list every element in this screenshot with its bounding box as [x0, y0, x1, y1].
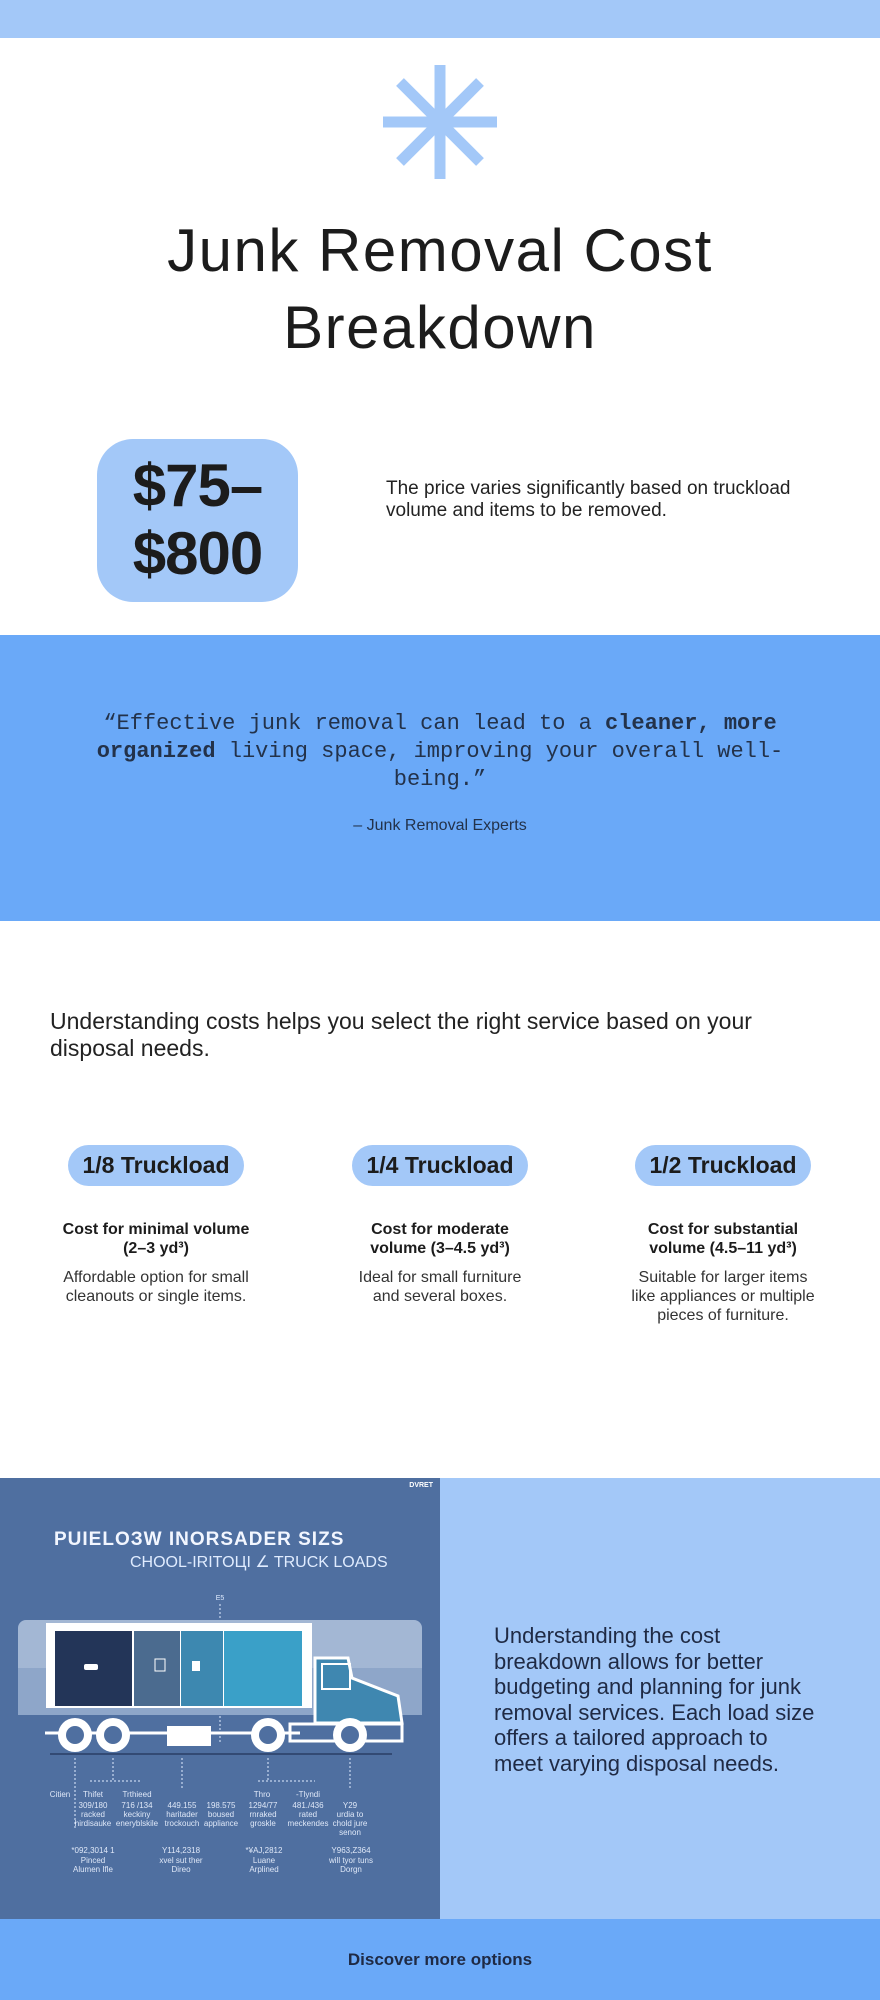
chart: truck load sizes illustration: Dorgn — [340, 1865, 362, 1874]
bold subtitle: volume (4.5–11 yd³) — [649, 1240, 797, 1257]
chart: truck load sizes illustration: 481./436 — [292, 1801, 324, 1810]
price badge — [97, 439, 298, 602]
chart: truck load sizes illustration: Direo — [171, 1865, 191, 1874]
chart: truck load sizes illustration: hirdisauke — [75, 1819, 112, 1828]
summary paragraph: budgeting and planning for junk — [494, 1674, 801, 1699]
pill — [68, 1145, 244, 1186]
footer: call to action: Discover more options — [348, 1950, 532, 1969]
chart: truck load sizes illustration: racked — [81, 1810, 105, 1819]
chart: truck load sizes illustration: chold jure — [333, 1819, 368, 1828]
bold subtitle — [63, 1221, 249, 1257]
quote text: “Effective junk removal can lead to a cleaner, more organized living space, improving your overall well-being.” — [97, 711, 783, 792]
price badge: $800 — [133, 520, 262, 587]
description — [359, 1269, 521, 1305]
bold subtitle: volume (3–4.5 yd³) — [370, 1240, 510, 1257]
chart: truck load sizes illustration: DVRET — [409, 1482, 434, 1489]
chart: truck load sizes illustration: Thro — [254, 1790, 271, 1799]
chart: truck load sizes illustration: E5 — [216, 1595, 224, 1602]
description — [631, 1269, 815, 1324]
chart: truck load sizes illustration: eneryblskile — [116, 1819, 159, 1828]
chart: truck load sizes illustration: rnraked — [249, 1810, 277, 1819]
chart: truck load sizes illustration: -Tlyndi — [296, 1790, 320, 1799]
chart: truck load sizes illustration: *¥AJ,2812 — [246, 1846, 283, 1855]
summary paragraph: meet varying disposal needs. — [494, 1750, 779, 1776]
chart: truck load sizes illustration: appliance — [204, 1819, 239, 1828]
summary paragraph: breakdown allows for better — [494, 1648, 763, 1674]
panel: 1/2 truckload — [631, 1145, 815, 1324]
chart: truck load sizes illustration — [0, 1478, 440, 1919]
chart: truck load sizes illustration: Trthieed — [122, 1790, 152, 1799]
pill — [635, 1145, 810, 1186]
intro text — [50, 1008, 752, 1061]
chart: truck load sizes illustration: keckiny — [124, 1810, 150, 1819]
chart: truck load sizes illustration: CHOOL-IRITOЦI ∠ TRUCK LOADS — [130, 1554, 388, 1571]
bold subtitle: Cost for moderate — [371, 1221, 509, 1238]
chart: truck load sizes illustration: 716 /134 — [121, 1801, 153, 1810]
chart: truck load sizes illustration: PUIELOЗW INORSADER SIZS — [54, 1529, 344, 1550]
chart: truck load sizes illustration: Alumen Ifle — [73, 1865, 114, 1874]
chart: truck load sizes illustration: 309/180 — [79, 1801, 108, 1810]
summary paragraph — [494, 1623, 814, 1776]
intro text: disposal needs. — [50, 1035, 210, 1061]
description: Affordable option for small cleanouts or single items. — [63, 1269, 249, 1305]
price description: The price varies significantly based on truckload volume and items to be removed. — [386, 478, 790, 521]
summary paragraph: Understanding the cost — [494, 1623, 720, 1648]
description: like appliances or multiple — [631, 1288, 815, 1305]
price badge: $75– — [133, 452, 262, 519]
intro text: Understanding costs helps you select the right service based on your — [50, 1008, 752, 1034]
bold subtitle — [370, 1221, 510, 1257]
chart: truck load sizes illustration: 1294/77 — [249, 1801, 278, 1810]
chart: truck load sizes illustration: rated — [299, 1810, 317, 1819]
chart: truck load sizes illustration: Pinced — [81, 1856, 105, 1865]
footer: call to action — [0, 1919, 880, 2000]
bold subtitle — [648, 1221, 798, 1257]
bold subtitle: (2–3 yd³) — [123, 1240, 189, 1257]
chart: truck load sizes illustration: Thifet — [83, 1790, 104, 1799]
panel: summary text — [440, 1478, 880, 1919]
panel: 1/4 truckload — [352, 1145, 528, 1305]
chart: truck load sizes illustration: boused — [208, 1810, 234, 1819]
description: and several boxes. — [373, 1288, 507, 1305]
pill — [352, 1145, 528, 1186]
chart: truck load sizes illustration: 198.575 — [207, 1801, 236, 1810]
chart: truck load sizes illustration: meckendes — [288, 1819, 328, 1828]
bold subtitle: Cost for minimal volume — [63, 1221, 249, 1238]
panel: quote band — [0, 635, 880, 921]
chart: truck load sizes illustration: urdia to — [337, 1810, 364, 1819]
chart: truck load sizes illustration: Arplined — [249, 1865, 279, 1874]
chart: truck load sizes illustration: xvel sut ther — [159, 1856, 203, 1865]
chart: truck load sizes illustration: will tyor tuns — [328, 1856, 373, 1865]
pill: 1/2 Truckload — [649, 1152, 796, 1178]
icon: asterisk — [383, 65, 497, 179]
title: Breakdown — [283, 294, 597, 361]
chart: truck load sizes illustration: trockouch — [165, 1819, 199, 1828]
top bar — [0, 0, 880, 38]
summary paragraph: removal services. Each load size — [494, 1700, 814, 1724]
chart: truck load sizes illustration: Luane — [253, 1856, 276, 1865]
chart: truck load sizes illustration: haritader — [166, 1810, 198, 1819]
chart: truck load sizes illustration: Y114,2318 — [162, 1846, 201, 1855]
bold subtitle: Cost for substantial — [648, 1221, 798, 1238]
chart: truck load sizes illustration: *092,3014 1 — [71, 1846, 115, 1855]
summary paragraph: offers a tailored approach to — [494, 1725, 768, 1750]
pill: 1/8 Truckload — [82, 1152, 230, 1178]
title: Junk Removal Cost — [167, 217, 713, 284]
attribution: – Junk Removal Experts — [353, 817, 527, 834]
title — [167, 217, 713, 361]
chart: truck load sizes illustration: Citien — [50, 1790, 70, 1799]
description: Ideal for small furniture — [359, 1269, 521, 1286]
description: pieces of furniture. — [657, 1307, 789, 1324]
chart: truck load sizes illustration: Y963,Z364 — [331, 1846, 371, 1855]
chart: truck load sizes illustration: 449.155 — [168, 1801, 197, 1810]
description: Suitable for larger items — [639, 1269, 807, 1286]
panel: 1/8 truckload — [63, 1145, 249, 1305]
pill: 1/4 Truckload — [366, 1152, 514, 1178]
chart: truck load sizes illustration: groskle — [250, 1819, 276, 1828]
chart: truck load sizes illustration: senon — [339, 1828, 361, 1837]
chart: truck load sizes illustration: Y29 — [343, 1801, 358, 1810]
